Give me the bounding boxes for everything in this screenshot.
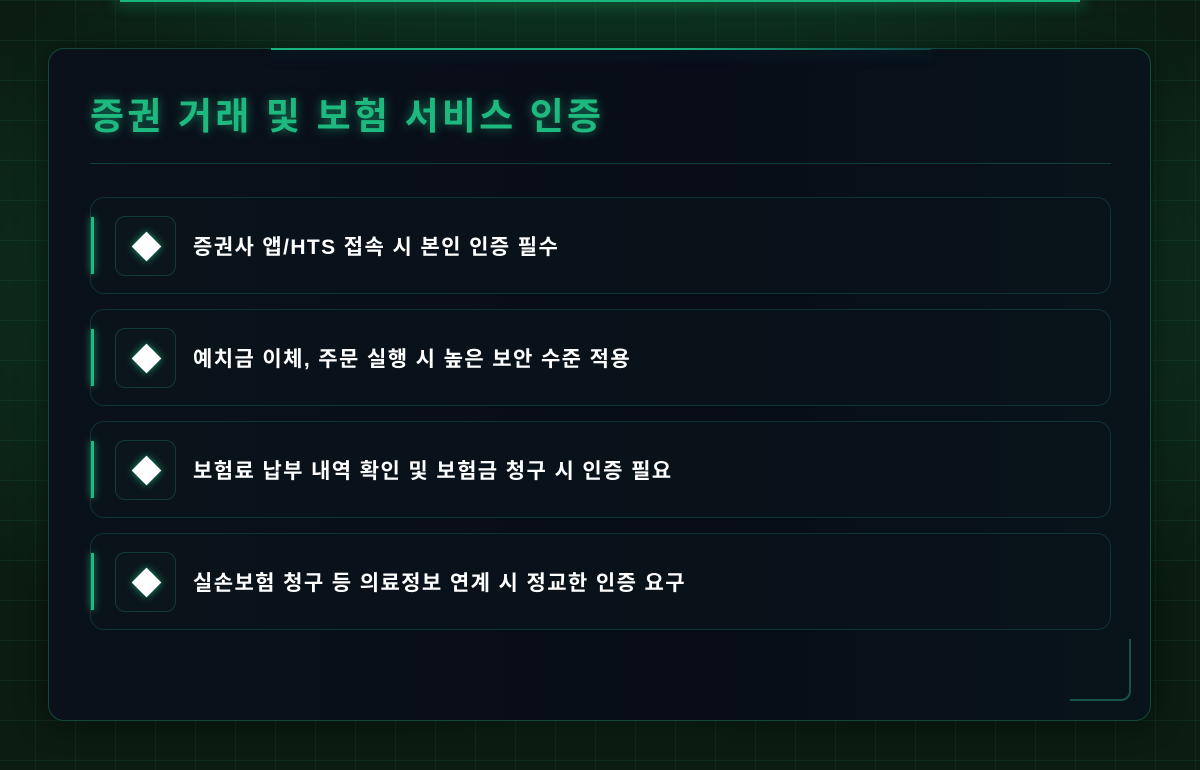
icon: diamond — [115, 552, 176, 612]
icon: diamond — [115, 216, 176, 276]
text 2: 예치금 이체, 주문 실행 시 높은 보안 수준 적용 — [193, 348, 631, 371]
item 4 — [90, 533, 1111, 630]
corner bracket — [1070, 639, 1131, 701]
icon: diamond — [115, 328, 176, 388]
title: 증권 거래 및 보험 서비스 인증 — [90, 96, 604, 137]
text 3: 보험료 납부 내역 확인 및 보험금 청구 시 인증 필요 — [193, 460, 673, 483]
icon: diamond — [115, 440, 176, 500]
item 1 — [90, 197, 1111, 294]
item 2 — [90, 309, 1111, 406]
text 4: 실손보험 청구 등 의료정보 연계 시 정교한 인증 요구 — [193, 572, 686, 595]
text 1: 증권사 앱/HTS 접속 시 본인 인증 필수 — [193, 236, 559, 259]
item 3 — [90, 421, 1111, 518]
